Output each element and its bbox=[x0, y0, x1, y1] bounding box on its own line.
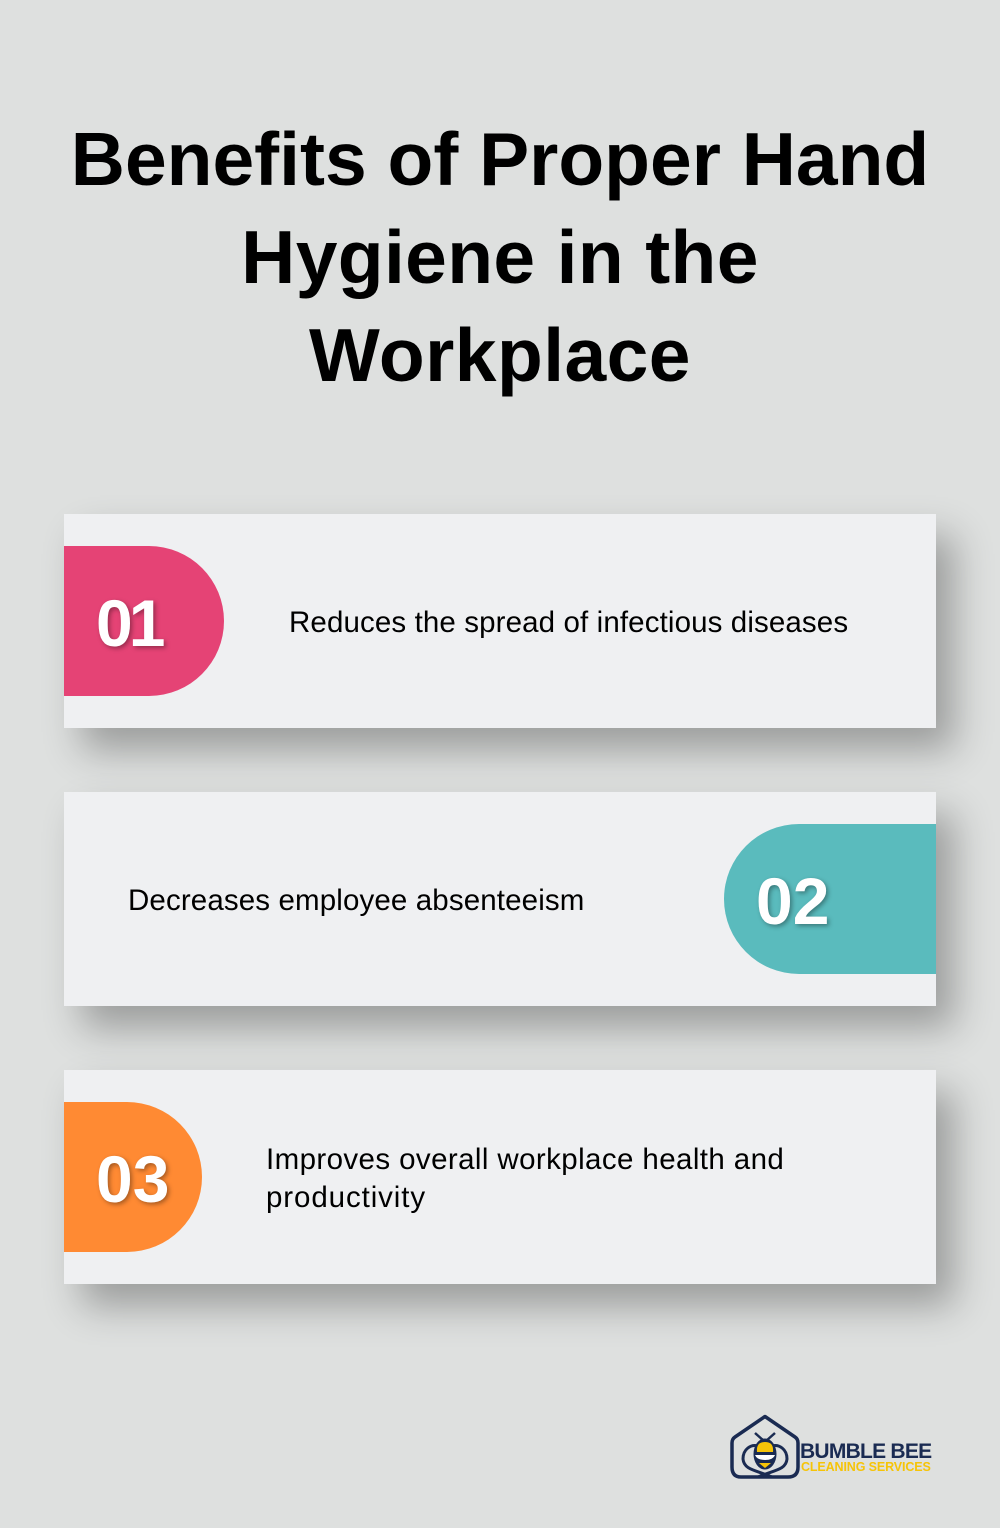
badge: 03: 03 bbox=[96, 1142, 169, 1216]
text: benefit 03 bbox=[266, 1142, 784, 1214]
logo name: BUMBLE BEE bbox=[800, 1440, 931, 1463]
title: Benefits of Proper Hand bbox=[71, 117, 929, 201]
title: Hygiene in the bbox=[241, 215, 759, 299]
title bbox=[71, 117, 929, 397]
text: benefit 03: productivity bbox=[266, 1180, 426, 1214]
logo tagline: CLEANING SERVICES bbox=[801, 1460, 931, 1474]
badge: 01 bbox=[64, 546, 224, 696]
badge: 02: 02 bbox=[756, 864, 829, 938]
title: Workplace bbox=[309, 313, 691, 397]
panel: benefit 03 bbox=[64, 1070, 936, 1284]
logo: Bumble Bee Cleaning Services bbox=[730, 1414, 932, 1479]
badge: 02 bbox=[724, 824, 936, 974]
panel: benefit 02 bbox=[64, 792, 936, 1006]
text: benefit 01: Reduces the spread of infectious diseases bbox=[289, 606, 848, 639]
text: benefit 02: Decreases employee absenteeism bbox=[128, 884, 584, 917]
text: benefit 03: Improves overall workplace health and bbox=[266, 1142, 784, 1176]
icon: bee in house bbox=[730, 1414, 800, 1479]
panel: benefit 01 bbox=[64, 514, 936, 728]
badge: 03 bbox=[64, 1102, 202, 1252]
badge: 01: 01 bbox=[96, 586, 161, 660]
